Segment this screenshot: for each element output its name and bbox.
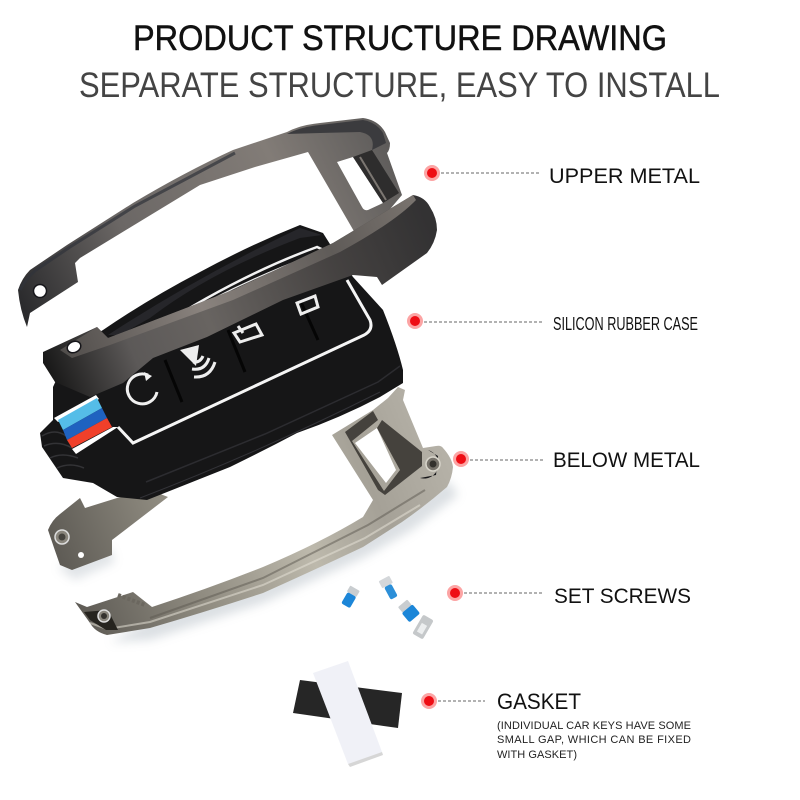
white outline [118,280,371,443]
gasket [293,661,402,767]
icon: lock [234,324,262,342]
exploded product illustration [18,118,458,767]
callout: gasket: SMALL GAP, WHICH CAN BE FIXED [497,734,691,746]
icon: speaker [180,345,215,377]
front rail [43,195,437,397]
callout: below metal: BELOW METAL [553,449,700,472]
callout: gasket: WITH GASKET) [497,749,577,761]
icon: restart arrow [127,372,157,404]
callout: set screws [447,585,691,608]
callout: upper metal: UPPER METAL [549,165,700,188]
silicon rubber case [40,225,403,500]
subtitle: SEPARATE STRUCTURE, EASY TO INSTALL [79,66,720,105]
callout: silicon rubber case: SILICON RUBBER CASE [553,314,698,334]
below metal frame [48,387,458,642]
set screws [340,576,434,640]
callout: gasket [421,689,691,761]
callout: gasket: GASKET [497,689,581,714]
stripe badge [54,395,118,454]
callout: set screws: SET SCREWS [554,585,691,608]
icon: unlock [297,296,318,314]
button dividers [165,300,318,402]
title: PRODUCT STRUCTURE DRAWING [133,19,667,58]
callout: below metal [453,449,700,472]
callout: gasket: (INDIVIDUAL CAR KEYS HAVE SOME [497,720,691,732]
callout: upper metal [424,165,700,188]
dark inner lid visible through the frame [108,228,322,335]
callout: silicon rubber case [407,313,698,334]
upper metal frame [18,118,437,397]
